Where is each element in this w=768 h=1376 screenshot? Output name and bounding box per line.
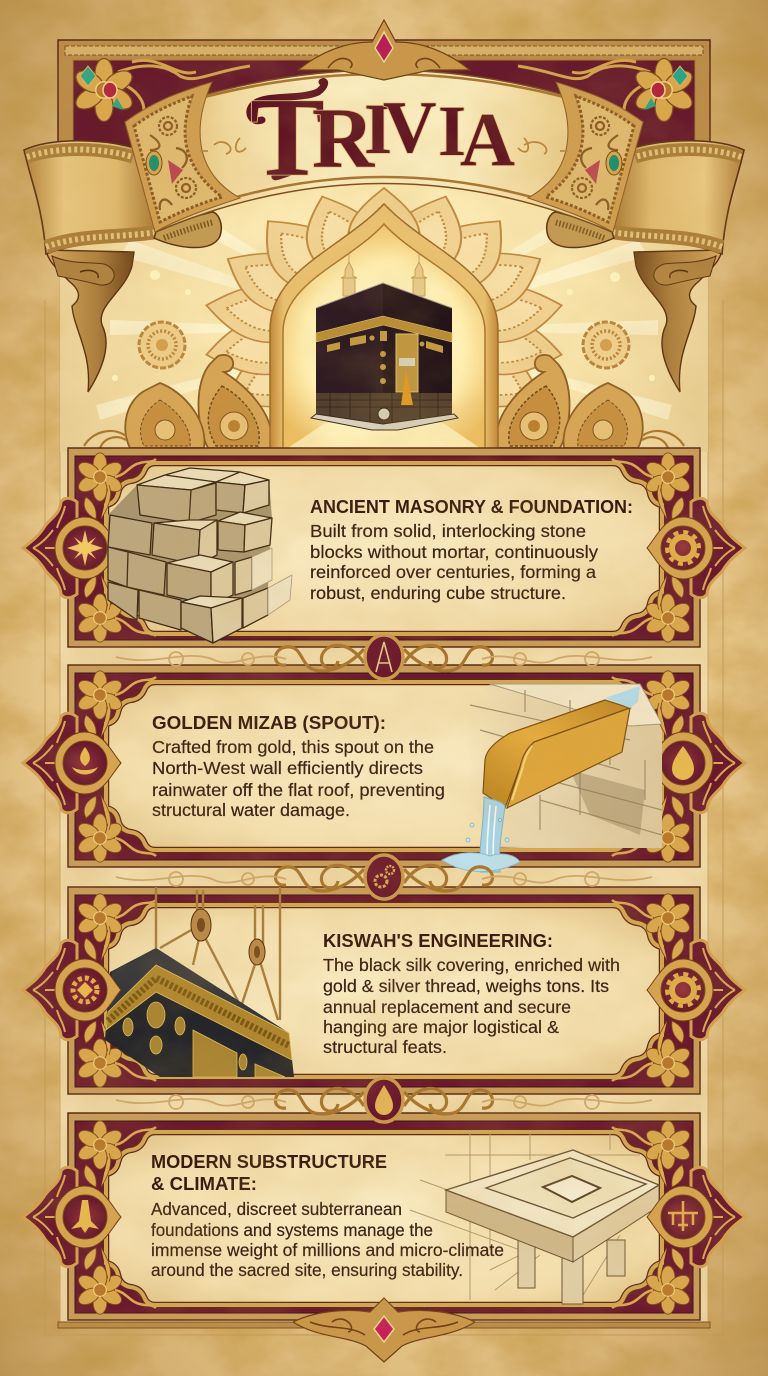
hero sunburst panel <box>60 150 708 452</box>
text: kiswah: hanging are major logistical & <box>323 1017 559 1037</box>
wall and spout illustration <box>442 684 662 872</box>
sparkles <box>112 270 655 381</box>
medallion right: gear <box>647 940 745 1040</box>
title: TRIVIA: I <box>364 89 392 169</box>
text: mizab <box>152 712 445 820</box>
medallion right: gear <box>647 498 745 598</box>
hanging kiswah illustration <box>105 887 294 1077</box>
banner top ornament with gem <box>298 20 470 80</box>
mandala behind arch <box>200 187 568 425</box>
bottom frame line <box>58 1322 710 1328</box>
corner flowers <box>76 671 692 862</box>
bottom ornament with gem <box>293 1298 475 1362</box>
ribbon left <box>24 141 221 392</box>
title: TRIVIA <box>250 76 515 200</box>
Kaaba <box>311 253 458 430</box>
corner flowers <box>76 894 692 1087</box>
panel: kiswah <box>23 887 745 1094</box>
corner flowers <box>76 1121 692 1314</box>
arch <box>270 204 498 450</box>
medallion left: sun <box>23 498 121 598</box>
title banner <box>125 20 643 232</box>
ribbon right <box>547 141 744 392</box>
text: mizab: structural water damage. <box>152 800 350 820</box>
title: TRIVIA: I <box>438 91 466 171</box>
text: mizab: Crafted from gold, this spout on the <box>152 737 434 757</box>
medallion right: drop <box>647 713 745 813</box>
inner cartouche <box>106 905 662 1077</box>
inner cartouche <box>106 682 662 850</box>
medallion left: lamp <box>23 713 121 813</box>
text: masonry: blocks without mortar, continuously <box>310 542 598 562</box>
text: substructure: & CLIMATE: <box>151 1173 257 1194</box>
text: kiswah: The black silk covering, enriched with <box>323 955 620 975</box>
text: masonry <box>310 496 633 603</box>
title: TRIVIA: V <box>383 87 436 169</box>
medallion left: foundation <box>23 1167 121 1267</box>
connector ornament: compass <box>116 635 652 679</box>
text: substructure: foundations and systems manage the <box>151 1220 433 1240</box>
top frame <box>58 40 710 150</box>
connector ornament: gears <box>116 855 652 899</box>
medallion left: geometric <box>23 940 121 1040</box>
text: kiswah: structural feats. <box>323 1037 447 1057</box>
corner flowers <box>76 453 692 642</box>
medallion right: instrument <box>647 1167 745 1267</box>
small side medallions <box>139 322 629 368</box>
title: TRIVIA: A <box>460 98 515 182</box>
text: masonry: robust, enduring cube structure. <box>310 583 566 603</box>
stone blocks illustration <box>108 468 292 643</box>
text: mizab: North-West wall efficiently directs <box>152 758 423 778</box>
text: mizab: GOLDEN MIZAB (SPOUT): <box>152 712 386 733</box>
text: kiswah: annual replacement and secure <box>323 997 571 1017</box>
text: substructure: immense weight of millions and micro-climate <box>151 1240 504 1260</box>
text: kiswah: gold & silver thread, weighs tons. Its <box>323 976 609 996</box>
text: kiswah <box>323 930 620 1057</box>
text: substructure <box>151 1151 504 1280</box>
connector ornament: drop <box>116 1078 652 1122</box>
inner cartouche <box>106 1132 662 1305</box>
text: substructure: MODERN SUBSTRUCTURE <box>151 1151 387 1172</box>
title: TRIVIA: T <box>250 76 325 200</box>
text: masonry: ANCIENT MASONRY & FOUNDATION: <box>310 496 633 517</box>
panel: ancient masonry <box>23 448 745 647</box>
title: TRIVIA: R <box>312 90 375 186</box>
panel: golden mizab <box>23 665 745 872</box>
blueprint platform illustration <box>410 1133 659 1304</box>
inner cartouche <box>106 463 662 634</box>
text: substructure: around the sacred site, ensuring stability. <box>151 1260 463 1280</box>
text: kiswah: KISWAH'S ENGINEERING: <box>323 930 553 951</box>
text: masonry: reinforced over centuries, forming a <box>310 562 596 582</box>
paisley ornaments <box>84 355 684 448</box>
text: masonry: Built from solid, interlocking stone <box>310 521 586 541</box>
panel: modern substructure <box>23 1113 745 1320</box>
text: mizab: rainwater off the flat roof, preventing <box>152 780 445 800</box>
text: substructure: Advanced, discreet subterranean <box>151 1199 402 1219</box>
